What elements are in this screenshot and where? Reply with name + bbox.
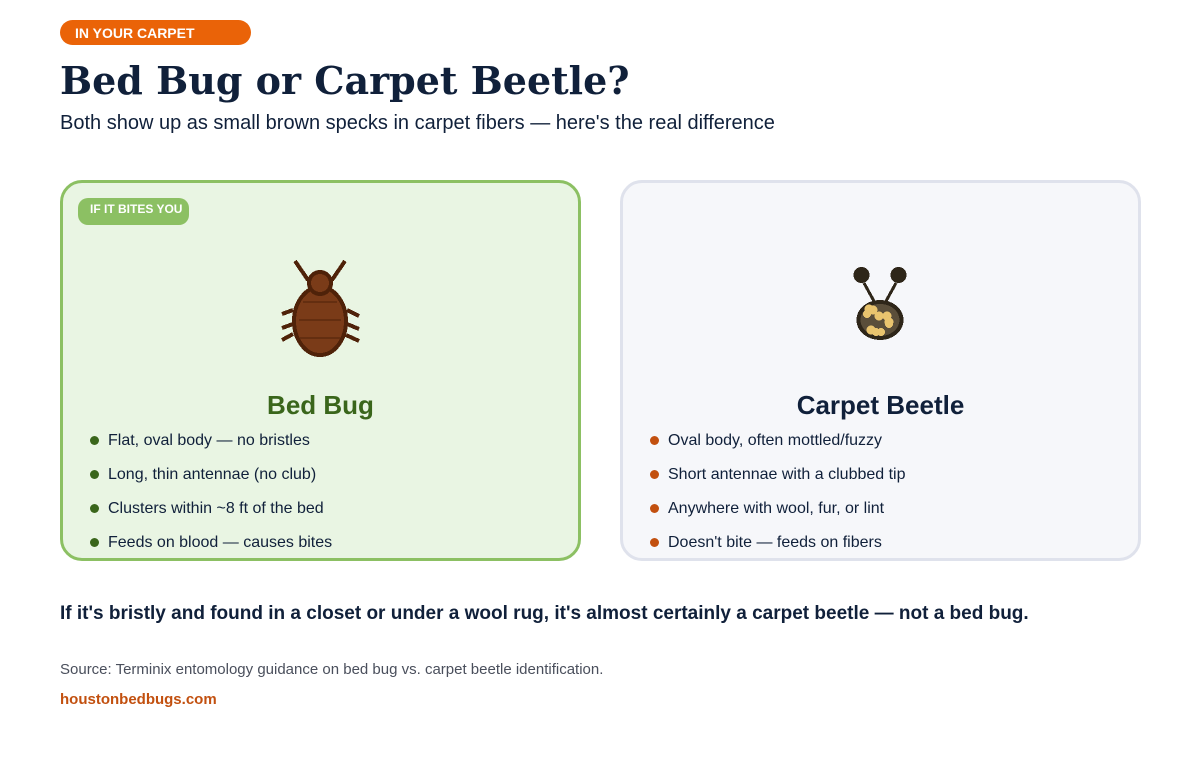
heading: bed bug: Bed Bug	[267, 390, 374, 420]
list item: Anywhere with wool, fur, or lint	[668, 500, 884, 517]
panel: bed bug	[60, 180, 581, 561]
badge: if it bites you: IF IT BITES YOU	[90, 202, 182, 216]
tag: in your carpet	[60, 20, 251, 45]
heading: carpet beetle: Carpet Beetle	[797, 390, 964, 420]
list item: Feeds on blood — causes bites	[108, 534, 332, 551]
list item: Doesn't bite — feeds on fibers	[668, 534, 882, 551]
source: Source: Terminix entomology guidance on bed bug vs. carpet beetle identification.	[60, 661, 603, 678]
list item: Oval body, often mottled/fuzzy	[668, 432, 882, 449]
list item: Clusters within ~8 ft of the bed	[108, 500, 324, 517]
icon: bed bug	[281, 260, 360, 357]
icon: carpet beetle	[854, 267, 906, 340]
tag: in your carpet: IN YOUR CARPET	[75, 25, 195, 41]
panel: carpet beetle	[620, 180, 1141, 561]
badge: if it bites you	[78, 198, 189, 225]
subtitle: Both show up as small brown specks in carpet fibers — here's the real difference	[60, 112, 775, 134]
site link: houstonbedbugs.com	[60, 691, 217, 708]
list item: Flat, oval body — no bristles	[108, 432, 310, 449]
list item: Long, thin antennae (no club)	[108, 466, 316, 483]
title: Bed Bug or Carpet Beetle?	[60, 58, 630, 103]
list item: Short antennae with a clubbed tip	[668, 466, 906, 483]
takeaway: If it's bristly and found in a closet or under a wool rug, it's almost certainly a carpet beetle — not a bed bug.	[60, 603, 1029, 624]
